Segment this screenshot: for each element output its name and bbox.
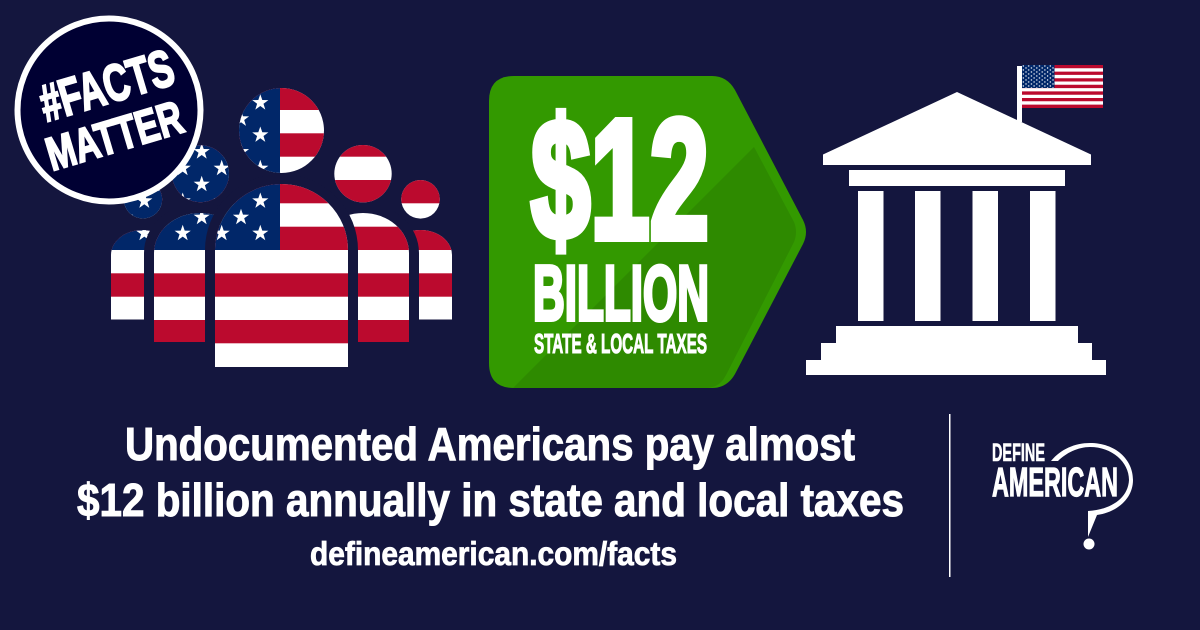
icon: government building with flag [806, 65, 1106, 375]
badge: #FACTS MATTER: MATTER [40, 90, 189, 181]
person: middle left [144, 145, 229, 342]
logo: Define American: DEFINE [992, 439, 1045, 467]
url: defineamerican.com/facts [310, 535, 677, 572]
logo: Define American [992, 439, 1133, 550]
headline: $12 billion annually in state and local taxes [77, 474, 904, 526]
label: BILLION: BILLION [533, 249, 709, 337]
icon: question mark swoosh [1051, 443, 1133, 537]
badge: #FACTS MATTER: #FACTS [33, 39, 181, 134]
person: far right [401, 180, 452, 320]
columns [858, 191, 1056, 321]
entablature [849, 170, 1065, 186]
headline [77, 418, 904, 526]
person: far left [111, 190, 162, 320]
roof [823, 92, 1091, 165]
icon: flag [1022, 65, 1103, 108]
flag pole [1017, 66, 1022, 122]
label: state and local taxes: STATE & LOCAL TAXES [534, 328, 707, 359]
divider [949, 414, 950, 577]
steps [806, 326, 1106, 375]
panel: green arrow with tax figure [489, 76, 806, 388]
icon: group of people in flag pattern [100, 80, 460, 367]
person: middle right [334, 145, 419, 342]
person: centre front [205, 88, 358, 367]
headline: Undocumented Americans pay almost [125, 418, 855, 470]
icon: question mark dot [1084, 538, 1094, 550]
big number: $12 [531, 85, 709, 275]
badge: #FACTS MATTER [18, 18, 200, 202]
